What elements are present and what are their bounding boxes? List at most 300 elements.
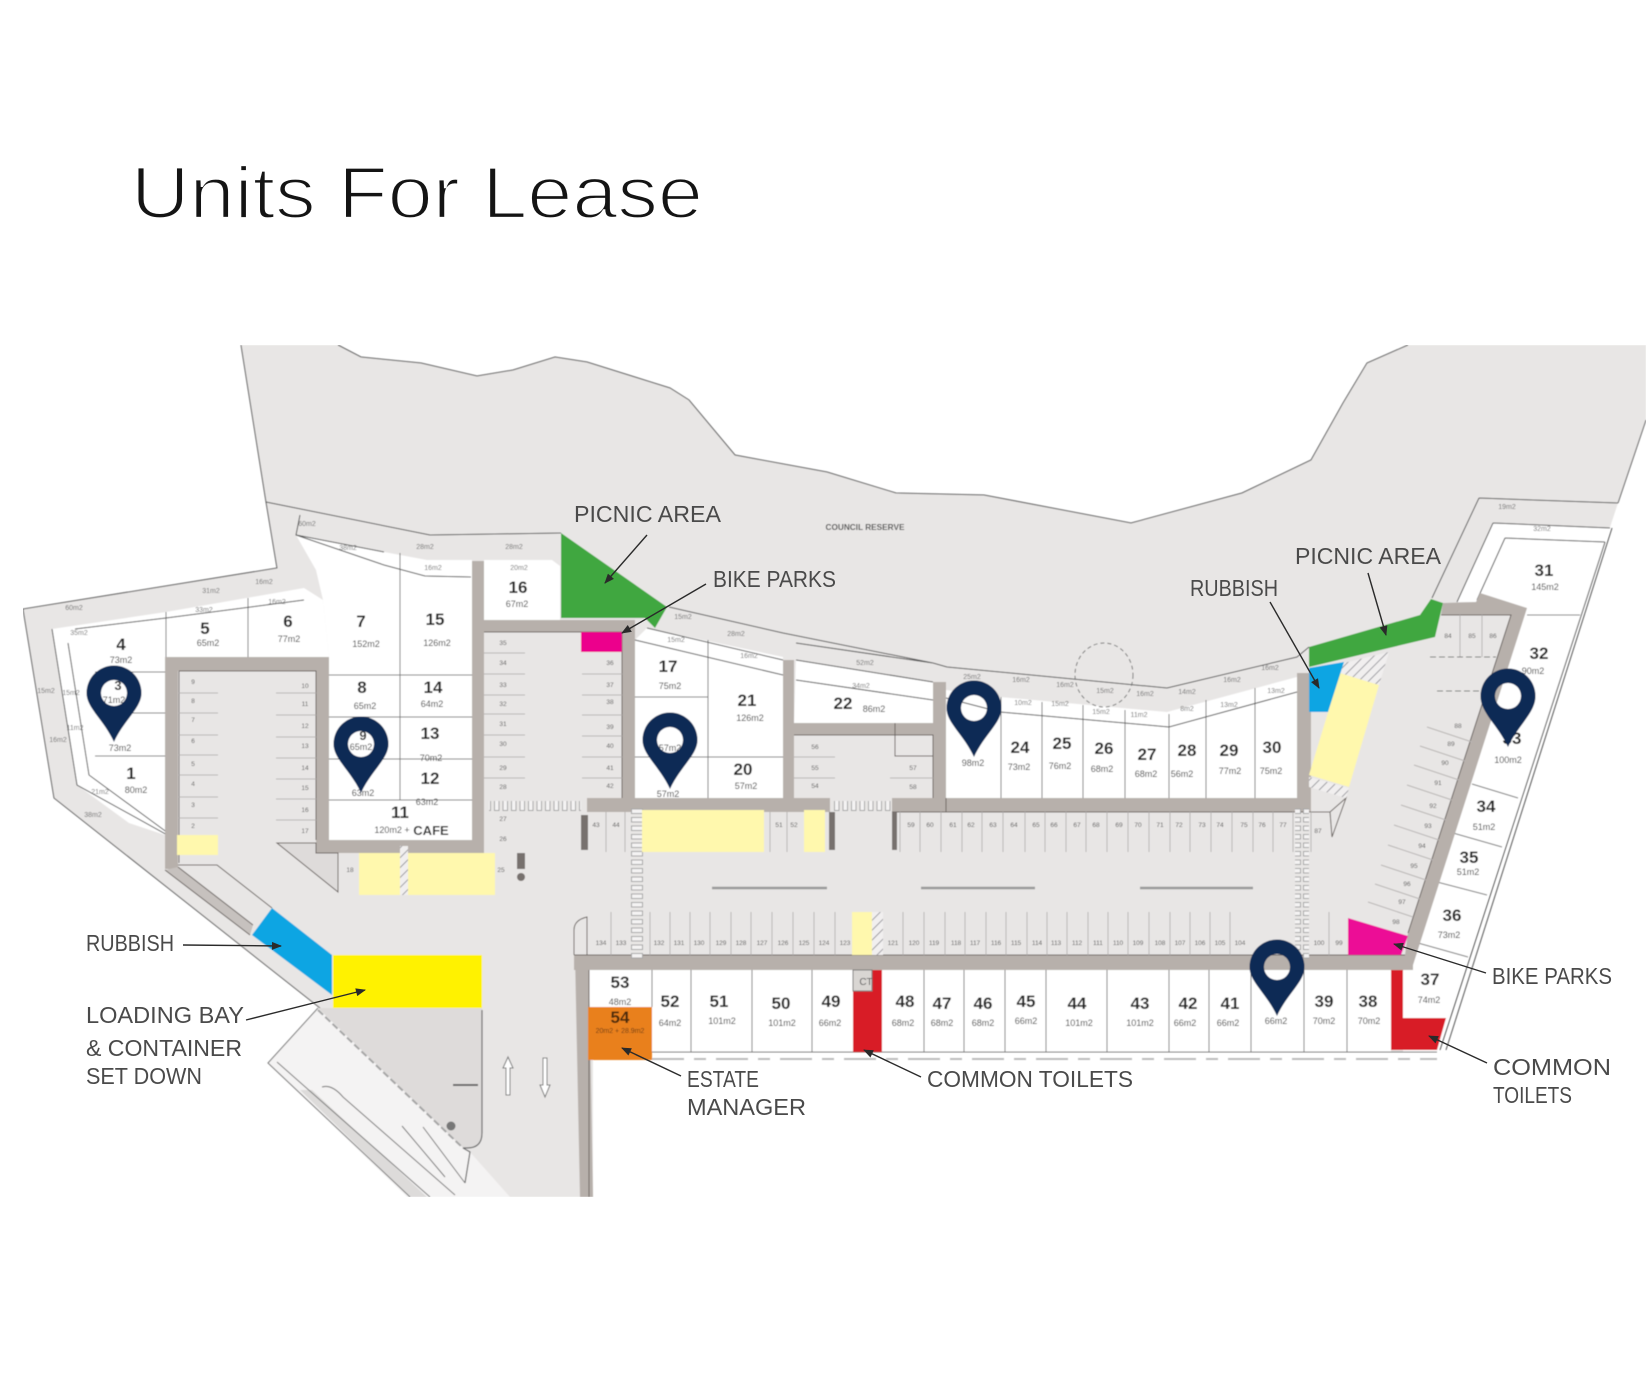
unit numbers and areas: 98m2 bbox=[962, 758, 984, 768]
parking bay numbers: 110 bbox=[1113, 940, 1124, 947]
unit numbers and areas: 20m2 + 28.9m2 bbox=[596, 1028, 645, 1035]
parking bay numbers: 112 bbox=[1072, 940, 1083, 947]
unit numbers and areas: 86m2 bbox=[863, 704, 885, 714]
parking bay numbers: 75 bbox=[1240, 822, 1248, 829]
callout: common toilets east: TOILETS bbox=[1493, 1082, 1572, 1108]
small frontage area labels: 28m2 bbox=[416, 544, 434, 551]
unit numbers and areas: 73m2 bbox=[110, 655, 132, 665]
dark parking bars bbox=[517, 812, 897, 881]
parking bay numbers: 114 bbox=[1032, 940, 1043, 947]
callout: rubbish east bbox=[1190, 575, 1319, 688]
aisle marking bars bbox=[712, 887, 1253, 889]
small frontage area labels: 21m2 bbox=[91, 789, 109, 796]
small frontage area labels: 15m2 bbox=[37, 688, 55, 695]
unit numbers and areas: 29 bbox=[1220, 741, 1238, 760]
unit numbers and areas: 8 bbox=[357, 678, 367, 697]
hatched zones bbox=[400, 652, 1389, 955]
parking bay numbers: 121 bbox=[888, 940, 899, 947]
parking bay numbers: 35 bbox=[499, 640, 507, 647]
unit numbers and areas: 75m2 bbox=[1260, 766, 1282, 776]
unit numbers and areas: 68m2 bbox=[1091, 764, 1113, 774]
parking bay numbers: 64 bbox=[1010, 822, 1018, 829]
unit numbers and areas: 66m2 bbox=[1174, 1018, 1196, 1028]
unit numbers and areas: 66m2 bbox=[1217, 1018, 1239, 1028]
unit numbers and areas: 145m2 bbox=[1531, 582, 1559, 592]
unit numbers and areas: 41 bbox=[1221, 994, 1239, 1013]
island kerb line bbox=[463, 1010, 482, 1183]
site ground and council reserve bbox=[23, 345, 1646, 1197]
pin 3 bbox=[642, 712, 698, 789]
parking bay numbers: 89 bbox=[1447, 741, 1455, 748]
callout: bike parks east bbox=[1394, 944, 1612, 989]
parking bay numbers: 57 bbox=[909, 765, 917, 772]
unit numbers and areas: 90m2 bbox=[1522, 666, 1544, 676]
unit numbers and areas: 126m2 bbox=[736, 713, 764, 723]
parking bay numbers: 132 bbox=[654, 940, 665, 947]
parking bay numbers bbox=[191, 633, 1497, 947]
parking bay numbers: 77 bbox=[1279, 822, 1287, 829]
small frontage area labels: 38m2 bbox=[339, 545, 357, 552]
pin 2 bbox=[334, 716, 388, 793]
parking bay numbers: 99 bbox=[1335, 940, 1343, 947]
unit numbers and areas: 74m2 bbox=[1418, 995, 1440, 1005]
unit numbers and areas: 65m2 bbox=[197, 638, 219, 648]
parking bay numbers: 52 bbox=[790, 822, 798, 829]
parking bay numbers: 44 bbox=[612, 822, 620, 829]
parking bay numbers: 109 bbox=[1133, 940, 1144, 947]
parking bay numbers: 126 bbox=[778, 940, 789, 947]
parking bay numbers: 86 bbox=[1489, 633, 1497, 640]
parking bay numbers: 30 bbox=[499, 741, 507, 748]
parking bay numbers: 84 bbox=[1444, 633, 1452, 640]
unit numbers and areas: 48 bbox=[896, 992, 914, 1011]
parking bay numbers: 127 bbox=[757, 940, 768, 947]
council reserve label: COUNCIL RESERVE bbox=[826, 522, 905, 532]
parking bay numbers: 97 bbox=[1398, 899, 1406, 906]
parking bay numbers: 129 bbox=[716, 940, 727, 947]
parking bay numbers: 116 bbox=[991, 940, 1002, 947]
small frontage area labels: 33m2 bbox=[195, 607, 213, 614]
parking bay numbers: 67 bbox=[1073, 822, 1081, 829]
common toilets central bbox=[853, 970, 882, 1052]
callout: estate manager: MANAGER bbox=[687, 1094, 806, 1120]
parking bay numbers: 31 bbox=[499, 721, 507, 728]
parking bay numbers: 51 bbox=[775, 822, 783, 829]
parking bay numbers: 58 bbox=[909, 784, 917, 791]
unit numbers and areas: 45 bbox=[1017, 992, 1035, 1011]
parking bay numbers: 43 bbox=[592, 822, 600, 829]
unit numbers and areas: 25 bbox=[1053, 734, 1071, 753]
parking bay numbers: 40 bbox=[606, 743, 614, 750]
parking bay numbers: 28 bbox=[499, 784, 507, 791]
parking bay numbers: 11 bbox=[302, 701, 309, 708]
parking bay numbers: 115 bbox=[1011, 940, 1022, 947]
parking bay numbers: 124 bbox=[819, 940, 830, 947]
pin 5 bbox=[1480, 668, 1536, 747]
unit numbers and areas: 53 bbox=[611, 973, 629, 992]
unit numbers and areas: 66m2 bbox=[819, 1018, 841, 1028]
parking bay numbers: 69 bbox=[1115, 822, 1123, 829]
unit numbers and areas: 57m2 bbox=[657, 789, 679, 799]
unit numbers and areas: 77m2 bbox=[1219, 766, 1241, 776]
parking bay numbers: 131 bbox=[674, 940, 685, 947]
callout: picnic area west bbox=[574, 501, 722, 583]
parking bay numbers: 34 bbox=[499, 660, 507, 667]
direction arrow down bbox=[540, 1058, 550, 1097]
parking bay numbers: 25 bbox=[497, 867, 505, 874]
unit numbers and areas: 73m2 bbox=[109, 743, 131, 753]
small frontage area labels: 15m2 bbox=[1096, 688, 1114, 695]
parking bay numbers: 36 bbox=[606, 660, 614, 667]
callout: common toilets east: COMMON bbox=[1493, 1054, 1611, 1080]
parking bay numbers: 120 bbox=[909, 940, 920, 947]
parking bay numbers: 87 bbox=[1314, 828, 1322, 835]
unit numbers and areas: 76m2 bbox=[1049, 761, 1071, 771]
dash mark bbox=[453, 1084, 478, 1086]
parking bay numbers: 16 bbox=[301, 807, 309, 814]
road verge bbox=[268, 1008, 510, 1197]
pin 4 bbox=[946, 680, 1002, 757]
callout: bike parks west: BIKE PARKS bbox=[713, 566, 836, 592]
small frontage area labels: 15m2 bbox=[674, 614, 692, 621]
unit numbers and areas: 48m2 bbox=[609, 997, 631, 1007]
parking bay numbers: 6 bbox=[191, 738, 195, 745]
small frontage area labels: 10m2 bbox=[1014, 700, 1032, 707]
unit numbers and areas: 16 bbox=[509, 578, 527, 597]
parking bay numbers: 71 bbox=[1156, 822, 1164, 829]
unit numbers and areas: 51m2 bbox=[1473, 822, 1495, 832]
unit numbers and areas: 50 bbox=[772, 994, 790, 1013]
small frontage area labels: 28m2 bbox=[505, 544, 523, 551]
parking bay numbers: 128 bbox=[736, 940, 747, 947]
parking bay dividers bbox=[179, 615, 1482, 955]
bike parks west bbox=[581, 632, 622, 652]
parking bay numbers: 94 bbox=[1418, 843, 1426, 850]
small frontage area labels: 16m2 bbox=[1261, 665, 1279, 672]
parking bay numbers: 105 bbox=[1215, 940, 1226, 947]
parking bay numbers: 98 bbox=[1392, 919, 1400, 926]
small frontage area labels: 16m2 bbox=[424, 565, 442, 572]
small frontage area labels: 19m2 bbox=[1498, 504, 1516, 511]
small frontage area labels: 32m2 bbox=[1533, 526, 1551, 533]
picnic area west bbox=[561, 533, 667, 628]
pin 6 bbox=[1250, 940, 1304, 1016]
unit numbers and areas: 9 bbox=[359, 728, 367, 743]
rubbish west bbox=[252, 908, 332, 995]
parking bay numbers: 133 bbox=[616, 940, 627, 947]
dashed parking limits bbox=[1430, 657, 1496, 691]
unit numbers and areas: 73m2 bbox=[1438, 930, 1460, 940]
small frontage area labels: 52m2 bbox=[856, 660, 874, 667]
unit numbers and areas: 12 bbox=[421, 769, 439, 788]
callout: loading bay and container set down bbox=[86, 990, 365, 1089]
parking bay numbers: 134 bbox=[596, 940, 607, 947]
unit numbers and areas: 101m2 bbox=[1065, 1018, 1093, 1028]
parking bay numbers: 59 bbox=[907, 822, 915, 829]
parking bay numbers: 70 bbox=[1134, 822, 1142, 829]
callout: bike parks east: BIKE PARKS bbox=[1492, 963, 1612, 989]
dashed frontage line bbox=[652, 1058, 1437, 1060]
parking bay numbers: 3 bbox=[191, 802, 195, 809]
parking bay numbers: 15 bbox=[301, 785, 309, 792]
unit numbers and areas: 21 bbox=[738, 691, 756, 710]
direction arrow up bbox=[503, 1057, 513, 1095]
callout: bike parks west bbox=[622, 566, 836, 633]
unit numbers and areas: 32 bbox=[1530, 644, 1548, 663]
wall outlines bbox=[165, 615, 1511, 1197]
unit numbers and areas: 33 bbox=[1503, 729, 1521, 748]
small frontage area labels: 15m2 bbox=[1092, 709, 1110, 716]
unit numbers and areas: 101m2 bbox=[768, 1018, 796, 1028]
road detail lines bbox=[268, 1008, 465, 1197]
small frontage area labels: 11m2 bbox=[1130, 712, 1148, 719]
callout: rubbish west: RUBBISH bbox=[86, 930, 174, 956]
small frontage area labels: 15m2 bbox=[667, 637, 685, 644]
unit numbers and areas: 6 bbox=[283, 612, 293, 631]
parking bay numbers: 39 bbox=[606, 724, 614, 731]
small frontage area labels: 16m2 bbox=[268, 599, 286, 606]
parking bay numbers: 33 bbox=[499, 682, 507, 689]
parking bay numbers: 54 bbox=[811, 783, 819, 790]
triangular kerb island bbox=[277, 843, 338, 892]
small frontage area labels: 16m2 bbox=[1056, 682, 1074, 689]
parking bay numbers: 37 bbox=[606, 682, 614, 689]
unit numbers and areas: 68m2 bbox=[1135, 769, 1157, 779]
unit numbers and areas: 63m2 bbox=[352, 788, 374, 798]
parking bay numbers: 55 bbox=[811, 765, 819, 772]
unit numbers and areas: 152m2 bbox=[352, 639, 380, 649]
unit numbers and areas: 70m2 bbox=[1313, 1016, 1335, 1026]
unit numbers and areas: 66m2 bbox=[1015, 1016, 1037, 1026]
pedestrian crossings bbox=[489, 801, 1309, 961]
parking bay numbers: 111 bbox=[1093, 940, 1103, 947]
unit numbers and areas: 126m2 bbox=[423, 638, 451, 648]
unit numbers and areas: 35 bbox=[1460, 848, 1478, 867]
unit numbers and areas: 68m2 bbox=[892, 1018, 914, 1028]
small frontage area labels: 31m2 bbox=[202, 588, 220, 595]
callout: loading bay and container set down: LOADING BAY bbox=[86, 1002, 244, 1028]
parking bay numbers: 60 bbox=[926, 822, 934, 829]
parking bay numbers: 76 bbox=[1258, 822, 1266, 829]
small frontage area labels: 34m2 bbox=[852, 683, 870, 690]
unit numbers and areas: 68m2 bbox=[931, 1018, 953, 1028]
parking bay numbers: 4 bbox=[191, 781, 195, 788]
callout: picnic area west: PICNIC AREA bbox=[574, 501, 722, 527]
small frontage area labels: 16m2 bbox=[1223, 677, 1241, 684]
small frontage area labels: 16m2 bbox=[740, 653, 758, 660]
common toilets central: CT bbox=[859, 977, 873, 988]
unit numbers and areas: 63m2 bbox=[416, 797, 438, 807]
unit numbers and areas: 30 bbox=[1263, 738, 1281, 757]
small frontage area labels: 16m2 bbox=[1012, 677, 1030, 684]
loading island bbox=[318, 1008, 482, 1148]
parking bay numbers: 26 bbox=[499, 836, 507, 843]
parking bay numbers: 93 bbox=[1424, 823, 1432, 830]
parking bay numbers: 119 bbox=[929, 940, 940, 947]
bike parks east bbox=[1348, 918, 1408, 955]
pin 1 bbox=[86, 665, 142, 742]
unit numbers and areas: 28 bbox=[1178, 741, 1196, 760]
pale yellow zones bbox=[177, 673, 1379, 955]
unit numbers and areas: 101m2 bbox=[708, 1016, 736, 1026]
parking bay numbers: 65 bbox=[1032, 822, 1040, 829]
parking bay numbers: 85 bbox=[1468, 633, 1476, 640]
callout: common toilets east bbox=[1429, 1036, 1611, 1108]
unit numbers and areas: 75m2 bbox=[659, 681, 681, 691]
white unit floors bbox=[52, 523, 1610, 1052]
unit numbers and areas: 37 bbox=[1421, 970, 1439, 989]
unit numbers and areas: 46 bbox=[974, 994, 992, 1013]
unit numbers and areas: 64m2 bbox=[659, 1018, 681, 1028]
unit numbers and areas: 38 bbox=[1359, 992, 1377, 1011]
parking bay numbers: 27 bbox=[499, 816, 507, 823]
parking bay numbers: 72 bbox=[1175, 822, 1183, 829]
parking bay numbers: 107 bbox=[1175, 940, 1186, 947]
road grey band bbox=[300, 1090, 427, 1197]
small frontage area labels: 15m2 bbox=[1051, 701, 1069, 708]
parking bay numbers: 88 bbox=[1454, 723, 1462, 730]
callout: rubbish east: RUBBISH bbox=[1190, 575, 1278, 601]
callout: estate manager: ESTATE bbox=[687, 1066, 759, 1092]
parking bay numbers: 90 bbox=[1441, 760, 1449, 767]
parking bay numbers: 42 bbox=[606, 783, 614, 790]
parking bay numbers: 14 bbox=[301, 765, 309, 772]
unit numbers and areas: 67m2 bbox=[506, 599, 528, 609]
parking bay numbers: 95 bbox=[1410, 863, 1418, 870]
unit numbers and areas: 42 bbox=[1179, 994, 1197, 1013]
callout: picnic area east: PICNIC AREA bbox=[1295, 543, 1442, 569]
small frontage area labels bbox=[37, 504, 1551, 819]
small frontage area labels: 14m2 bbox=[1178, 689, 1196, 696]
unit numbers and areas: 49 bbox=[822, 992, 840, 1011]
small frontage area labels: 8m2 bbox=[1180, 706, 1194, 713]
unit numbers and areas: 1 bbox=[126, 764, 136, 783]
unit numbers and areas: 56m2 bbox=[1171, 769, 1193, 779]
parking bay numbers: 68 bbox=[1092, 822, 1100, 829]
parking bay numbers: 118 bbox=[951, 940, 962, 947]
parking bay numbers: 74 bbox=[1216, 822, 1224, 829]
parking bay numbers: 63 bbox=[989, 822, 997, 829]
unit numbers and areas: 44 bbox=[1068, 994, 1087, 1013]
parking bay numbers: 92 bbox=[1429, 803, 1437, 810]
unit numbers and areas: 54 bbox=[611, 1008, 630, 1027]
unit numbers and areas: 101m2 bbox=[1126, 1018, 1154, 1028]
site boundary lines bbox=[23, 345, 1646, 1008]
unit numbers and areas: 70m2 bbox=[420, 753, 442, 763]
unit numbers and areas: 57m2 bbox=[735, 781, 757, 791]
frontage boundary lines bbox=[52, 498, 1618, 1050]
parking bay numbers: 10 bbox=[301, 683, 309, 690]
small frontage area labels: 16m2 bbox=[49, 737, 67, 744]
small frontage area labels: 16m2 bbox=[1136, 691, 1154, 698]
walls bbox=[165, 561, 1527, 1197]
unit numbers and areas: 57m2 bbox=[659, 743, 681, 753]
unit numbers and areas: 13 bbox=[421, 724, 439, 743]
parking bay numbers: 73 bbox=[1198, 822, 1206, 829]
unit numbers and areas: 15 bbox=[426, 610, 444, 629]
unit numbers and areas: 22 bbox=[834, 694, 852, 713]
unit numbers and areas: 17 bbox=[659, 657, 677, 676]
small frontage area labels: 13m2 bbox=[1267, 688, 1285, 695]
parking bay numbers: 5 bbox=[191, 761, 195, 768]
unit numbers and areas bbox=[103, 561, 1559, 1035]
unit numbers and areas: 64m2 bbox=[421, 699, 443, 709]
unit numbers and areas: 51m2 bbox=[1457, 867, 1479, 877]
parking bay numbers: 8 bbox=[191, 698, 195, 705]
common toilets east bbox=[1391, 970, 1446, 1050]
small frontage area labels: 15m2 bbox=[62, 690, 80, 697]
parking bay numbers: 100 bbox=[1314, 940, 1325, 947]
dashed circle bbox=[1075, 643, 1133, 707]
dark marker circle bbox=[446, 1122, 456, 1130]
estate manager unit bbox=[588, 1007, 652, 1060]
small frontage area labels: 25m2 bbox=[963, 674, 981, 681]
parking bay numbers: 29 bbox=[499, 765, 507, 772]
unit numbers and areas: 24 bbox=[1011, 738, 1030, 757]
unit numbers and areas: 71m2 bbox=[103, 695, 125, 705]
small frontage area labels: 11m2 bbox=[66, 725, 84, 732]
parking bay numbers: 38 bbox=[606, 699, 614, 706]
unit divider lines bbox=[95, 553, 1580, 1052]
small frontage area labels: 60m2 bbox=[65, 605, 83, 612]
unit numbers and areas: 31 bbox=[1535, 561, 1553, 580]
parking bay numbers: 130 bbox=[694, 940, 705, 947]
unit numbers and areas: 65m2 bbox=[354, 701, 376, 711]
unit numbers and areas: 73m2 bbox=[1008, 762, 1030, 772]
unit numbers and areas: 100m2 bbox=[1494, 755, 1522, 765]
parking bay numbers: 113 bbox=[1051, 940, 1062, 947]
unit numbers and areas: 43 bbox=[1131, 994, 1149, 1013]
parking bay numbers: 106 bbox=[1195, 940, 1206, 947]
unit numbers and areas: 68m2 bbox=[972, 1018, 994, 1028]
rubbish east bbox=[1309, 662, 1344, 712]
parking bay numbers: 123 bbox=[840, 940, 851, 947]
unit numbers and areas: 7 bbox=[356, 612, 366, 631]
parking bay numbers: 12 bbox=[301, 723, 309, 730]
small frontage area labels: 38m2 bbox=[84, 812, 102, 819]
parking bay numbers: 41 bbox=[606, 765, 614, 772]
unit numbers and areas: 5 bbox=[200, 619, 210, 638]
unit numbers and areas: 120m2 + bbox=[374, 825, 410, 835]
parking bay numbers: 56 bbox=[811, 744, 819, 751]
parking bay numbers: 91 bbox=[1434, 780, 1442, 787]
island edges bbox=[318, 1010, 463, 1148]
unit numbers and areas: 51 bbox=[710, 992, 728, 1011]
parking bay numbers: 13 bbox=[301, 743, 309, 750]
parking bay numbers: 9 bbox=[191, 679, 195, 686]
parking bay numbers: 96 bbox=[1403, 881, 1411, 888]
parking bay numbers: 62 bbox=[967, 822, 975, 829]
unit numbers and areas: 3 bbox=[114, 678, 122, 693]
parking bay numbers: 108 bbox=[1155, 940, 1166, 947]
callout: picnic area east bbox=[1295, 543, 1442, 635]
parking bay numbers: 2 bbox=[191, 823, 195, 830]
unit numbers and areas: 66m2 bbox=[1265, 1016, 1287, 1026]
unit numbers and areas: 36 bbox=[1443, 906, 1461, 925]
loading bay bbox=[333, 955, 482, 1008]
unit numbers and areas: 34 bbox=[1477, 797, 1496, 816]
parking bay numbers: 117 bbox=[970, 940, 981, 947]
unit numbers and areas: CAFE bbox=[413, 823, 449, 838]
callout: estate manager bbox=[622, 1048, 806, 1120]
unit numbers and areas: 80m2 bbox=[125, 785, 147, 795]
parking bay numbers: 61 bbox=[949, 822, 957, 829]
picnic area east bbox=[1309, 599, 1443, 667]
unit numbers and areas: 4 bbox=[116, 635, 126, 654]
unit numbers and areas: 27 bbox=[1138, 745, 1156, 764]
unit numbers and areas: 77m2 bbox=[278, 634, 300, 644]
unit numbers and areas: 11 bbox=[391, 803, 409, 822]
